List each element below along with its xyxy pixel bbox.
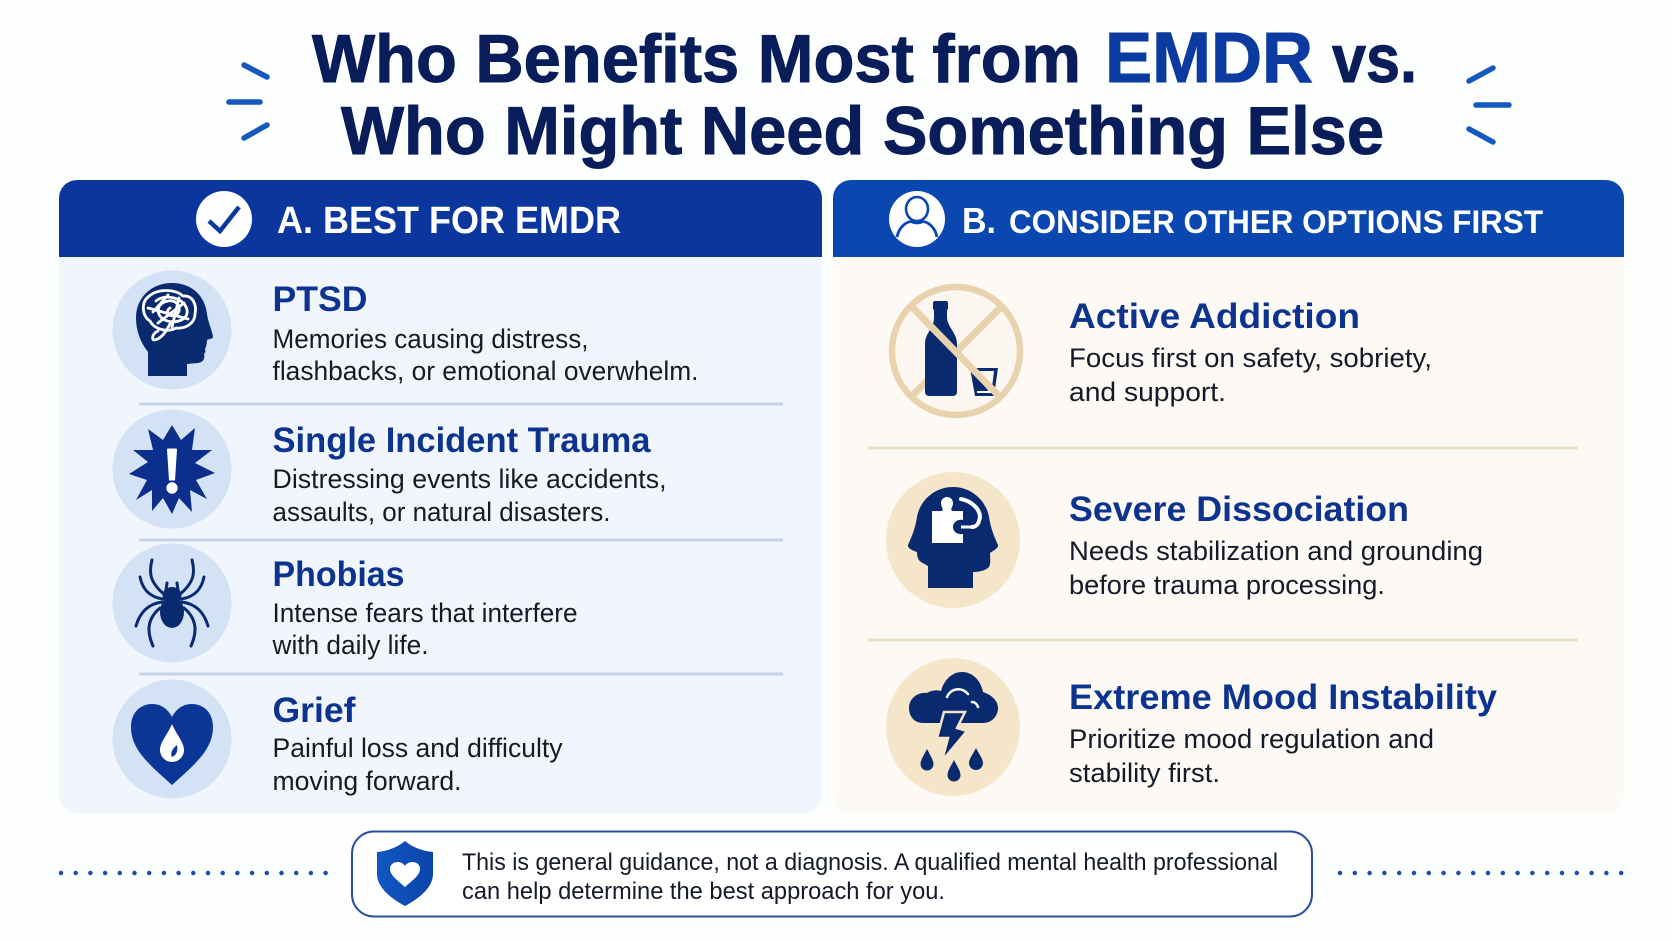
item: Severe Dissociation	[886, 472, 1483, 608]
icon: person	[889, 191, 945, 247]
icon: left title sparks	[229, 65, 267, 138]
title: vs.	[1332, 21, 1417, 97]
title: EMDR	[1105, 19, 1313, 98]
title: Who Might Need Something Else	[341, 93, 1384, 169]
icon: spider	[112, 544, 232, 662]
title	[312, 19, 1417, 169]
item: Extreme Mood Instability	[886, 658, 1498, 796]
callout: disclaimer	[352, 832, 1312, 916]
item: PTSD	[112, 270, 698, 390]
callout text: This is general guidance, not a diagnosis. A qualified mental health professional	[462, 849, 1278, 876]
heading A: A. BEST FOR EMDR	[277, 200, 621, 242]
item: Grief	[112, 680, 563, 798]
heading: PTSD	[272, 280, 368, 319]
description	[1069, 724, 1434, 788]
panel: B. consider other options first	[833, 180, 1624, 814]
icon: shield with heart	[377, 841, 433, 906]
description: Intense fears that interfere	[272, 598, 578, 628]
description: Needs stabilization and grounding	[1069, 536, 1483, 566]
panel header A	[59, 180, 822, 257]
icon: double head with puzzle piece	[886, 472, 1020, 608]
description: moving forward.	[272, 766, 462, 796]
description: before trauma processing.	[1069, 570, 1385, 600]
description: Focus first on safety, sobriety,	[1069, 343, 1432, 373]
description: Prioritize mood regulation and	[1069, 724, 1434, 754]
heading: Single Incident Trauma	[272, 421, 651, 460]
icon: crossed-out bottle and glass	[892, 287, 1020, 415]
icon: head with tangled scribble	[112, 270, 232, 390]
icon: check	[196, 191, 252, 247]
callout text: can help determine the best approach for you.	[462, 878, 945, 905]
item: Phobias	[112, 544, 578, 662]
description	[1069, 536, 1483, 600]
icon: right title sparks	[1469, 68, 1509, 142]
icon: heart with teardrop	[112, 680, 232, 798]
description: with daily life.	[272, 630, 428, 660]
description: assaults, or natural disasters.	[272, 497, 610, 527]
item: Active Addiction	[892, 287, 1432, 415]
panel header B	[833, 180, 1624, 257]
description: flashbacks, or emotional overwhelm.	[272, 356, 698, 386]
description: Painful loss and difficulty	[272, 733, 563, 763]
heading: Extreme Mood Instability	[1069, 678, 1498, 717]
heading: Grief	[272, 691, 356, 730]
description	[272, 598, 578, 660]
description	[1069, 343, 1432, 407]
description	[272, 464, 666, 527]
heading B: CONSIDER OTHER OPTIONS FIRST	[1009, 204, 1543, 240]
callout text	[462, 849, 1278, 905]
item: Single Incident Trauma	[112, 410, 666, 528]
icon: starburst with exclamation	[112, 410, 232, 528]
description	[272, 733, 563, 796]
icon: storm cloud	[886, 658, 1020, 796]
description: Memories causing distress,	[272, 324, 588, 354]
heading: Phobias	[272, 555, 404, 594]
heading B: B.	[962, 200, 996, 241]
title: Who Benefits Most from	[312, 21, 1081, 97]
heading: Active Addiction	[1069, 297, 1360, 336]
heading: Severe Dissociation	[1069, 490, 1409, 529]
description	[272, 324, 698, 386]
panel: A. best for EMDR	[59, 180, 822, 814]
description: stability first.	[1069, 758, 1220, 788]
description: and support.	[1069, 377, 1226, 407]
description: Distressing events like accidents,	[272, 464, 666, 494]
